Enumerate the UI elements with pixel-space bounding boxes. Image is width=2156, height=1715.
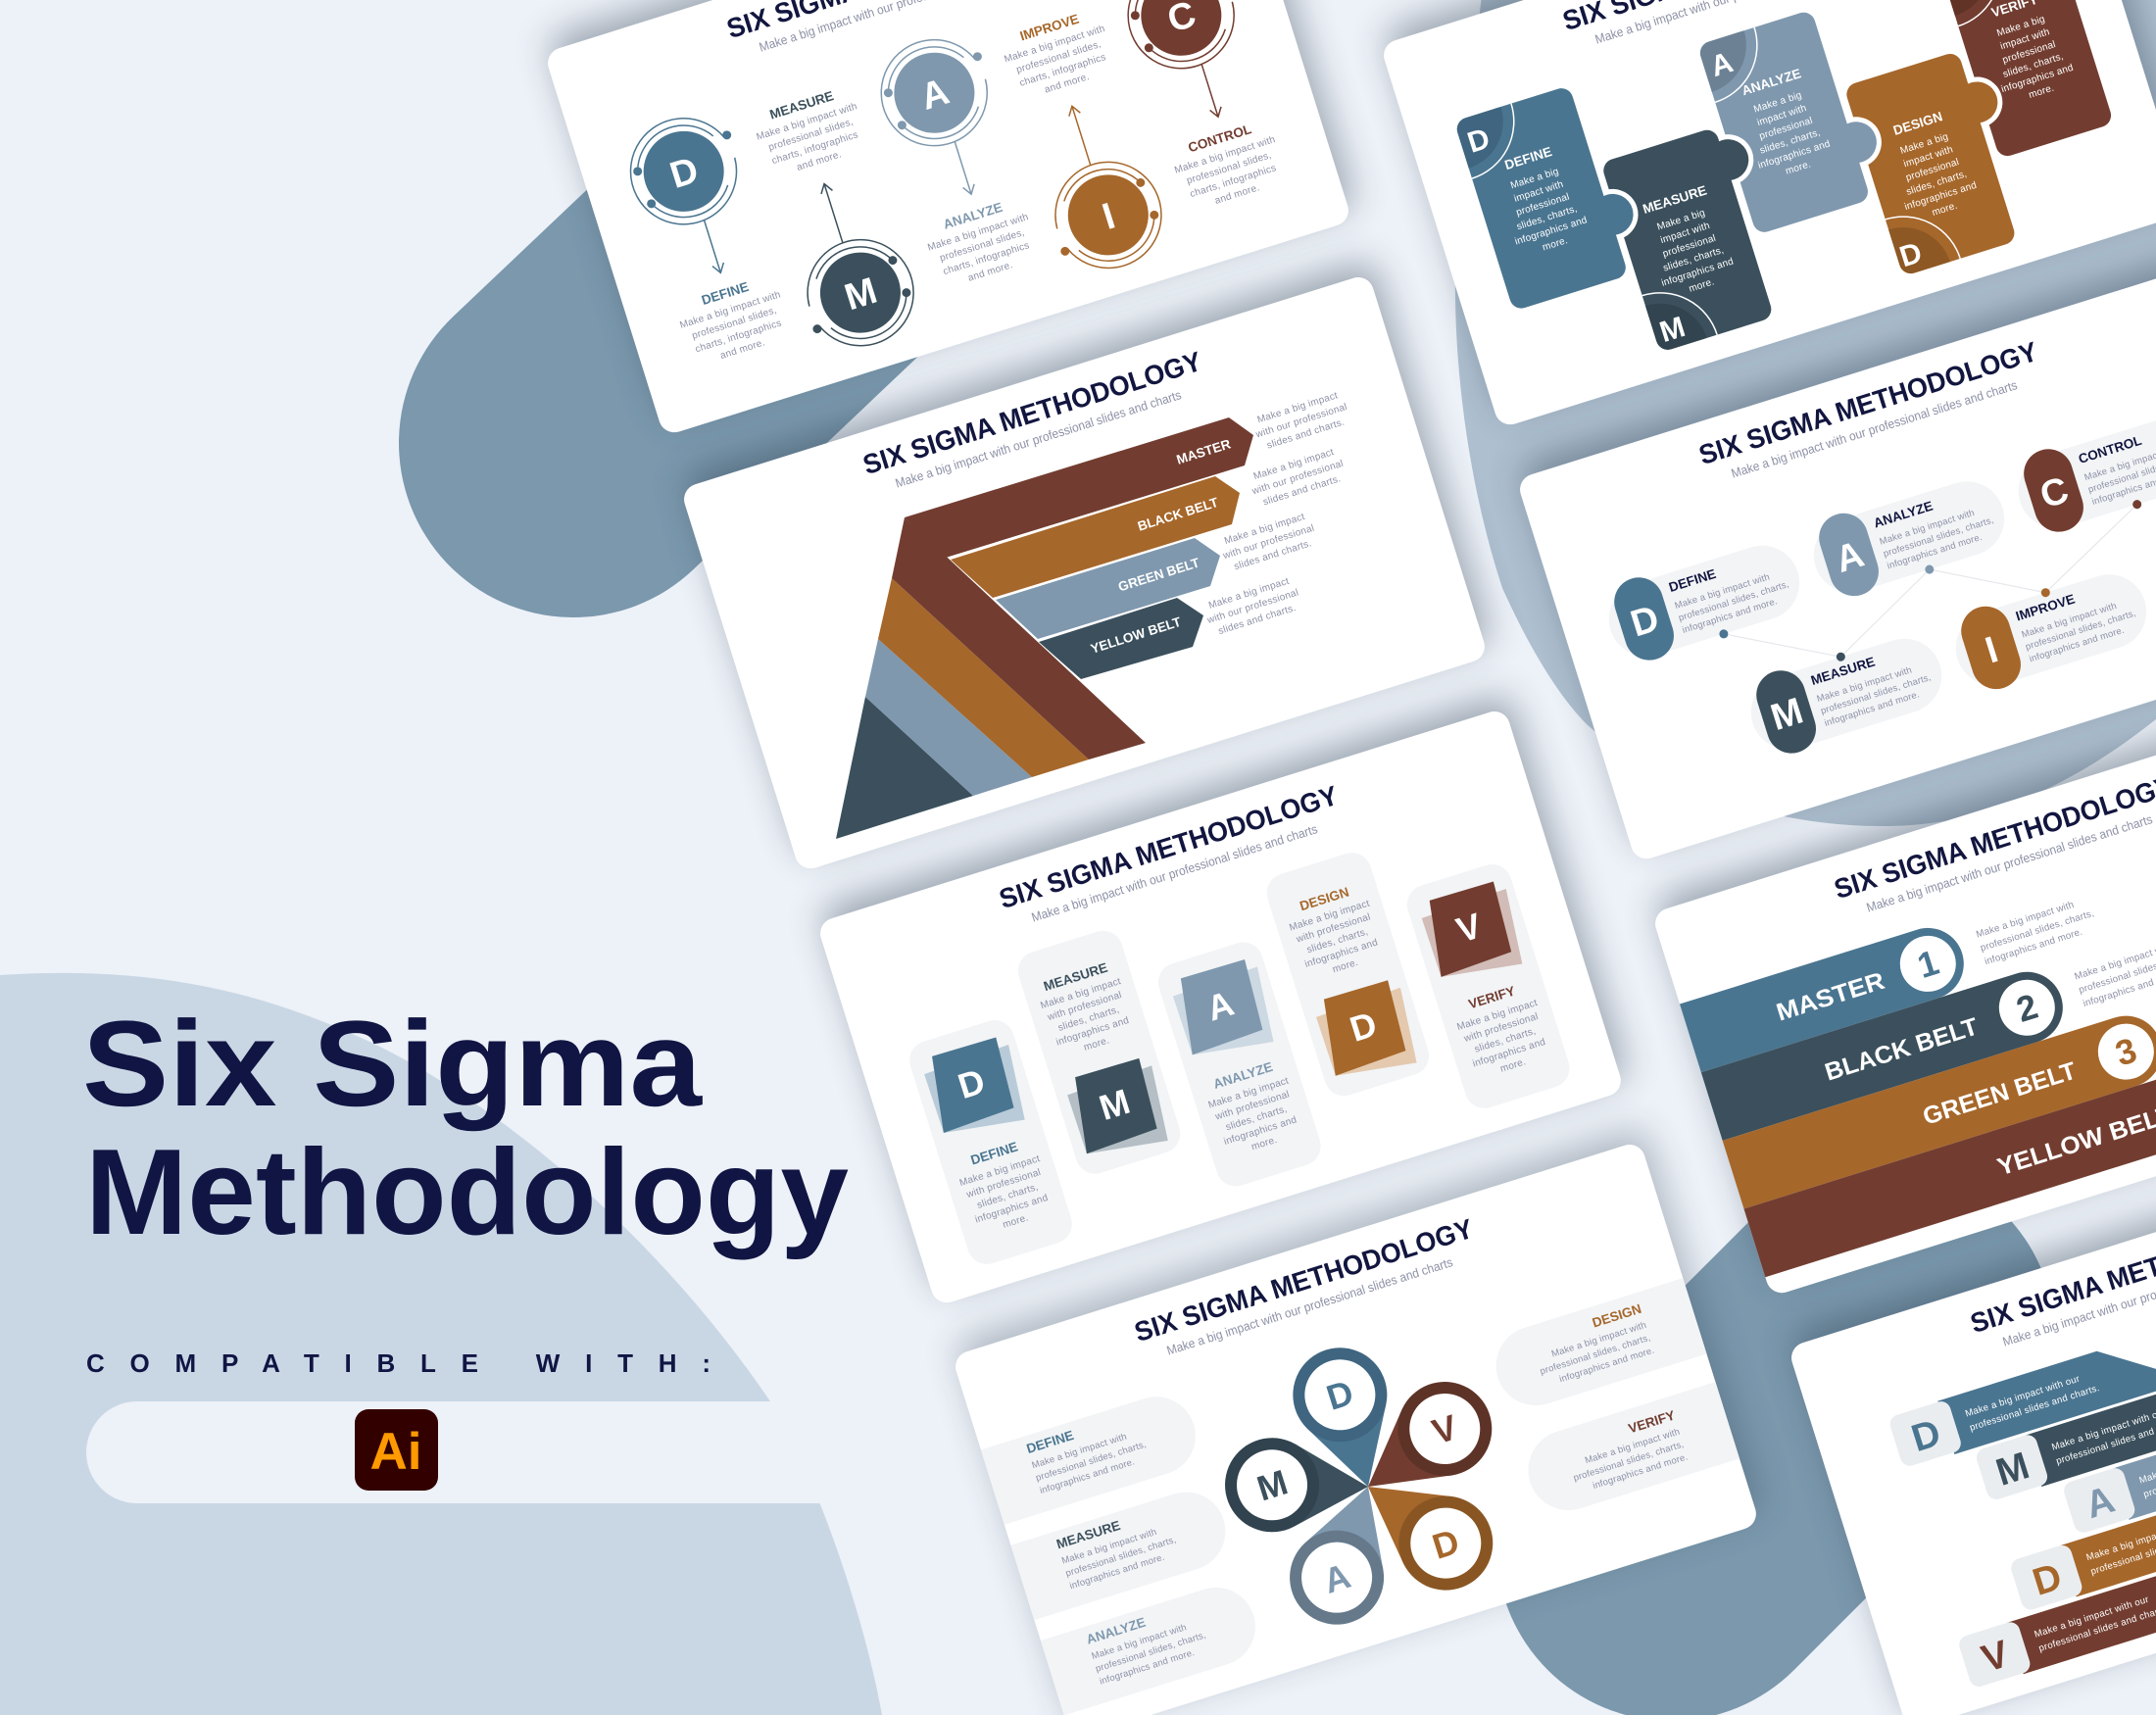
row: define: professional slides and charts. [1969,1383,2101,1434]
main title: Methodology [85,1125,849,1260]
capsule: improve: IMPROVE [2014,592,2077,623]
text: measure body: charts, infographics [770,129,859,167]
slide subtitle: Make a big impact with our professional slides and charts [1165,1254,1455,1358]
text: measure body: Make a big impact with [756,101,858,143]
node: D define: D [665,150,704,197]
piece: analyze: slides, charts, [1758,127,1822,157]
text: measure body: professional slides, [767,117,855,154]
column: define: with professional [964,1167,1042,1200]
capsule: analyze: ANALYZE [1872,498,1935,530]
row: verify: V [1977,1633,2014,1681]
pill: verify: VERIFY [1627,1408,1677,1436]
pill: analyze: infographics and more. [1099,1647,1196,1688]
band: green belt [1723,965,2156,1209]
column: design: more. [1331,957,1359,975]
node: I improve: I [1098,196,1120,238]
piece: analyze: impact with [1756,103,1808,128]
capsule: improve: infographics and more. [2028,625,2126,664]
panel: flower slide [948,1126,1778,1715]
capsule: improve: Make a big impact with [2021,601,2118,641]
band: master: MASTER [1773,967,1887,1027]
panel: stacked rows slide [1784,1117,2156,1715]
band descriptions: with our professional [1250,459,1345,498]
pill: verify: Make a big impact with [1584,1427,1682,1466]
capsule: analyze: infographics and more. [1886,532,1984,571]
slate blob behind left column [573,0,1102,443]
piece: design [1843,42,2044,276]
slide title: SIX SIGMA METHODOLOGY [996,780,1342,914]
band labels: GREEN BELT [1116,555,1201,594]
piece: measure: M [1656,311,1689,349]
piece: design: infographics and [1903,180,1979,213]
pill: measure: Make a big impact with [1060,1527,1158,1567]
flower chart: D [1428,1521,1464,1567]
slide subtitle: Make a big impact with our professional slides and charts [894,387,1184,491]
piece: measure: impact with [1659,220,1711,246]
capsule: measure: Make a big impact with [1816,664,1913,705]
node: M measure: MEASURE [768,88,835,122]
piece: design: impact with [1902,144,1954,170]
capsule: analyze: Make a big impact with [1879,508,1976,548]
capsule: control [2007,402,2156,542]
node: M measure: M [840,270,882,318]
column: analyze [1153,937,1326,1191]
column: measure: Make a big impact [1040,976,1122,1011]
capsule: define: infographics and more. [1681,596,1779,636]
capsule: analyze: A [1831,534,1869,581]
band: green belt: 3 [2111,1030,2141,1074]
node: D define: DEFINE [700,279,751,308]
row: analyze [2062,1363,2156,1536]
band descriptions: Make a big impact [1207,576,1291,612]
pill: define: professional slides, charts, [1035,1440,1148,1484]
panel: puzzle slide [1376,0,2156,428]
panel: columns slide [812,693,1633,1306]
column: verify: V [1451,905,1486,951]
pill: measure: professional slides, charts, [1064,1535,1178,1579]
row: define: Make a big impact with our [1964,1373,2082,1420]
row: verify: Make a big impact with our [2034,1594,2151,1641]
capsule: measure: M [1766,691,1808,739]
piece: verify: infographics and [2000,63,2075,95]
column: define: D [954,1060,990,1106]
band descriptions: slides and charts. [1217,603,1298,637]
column: measure: slides, charts, [1056,1004,1121,1034]
column: define: infographics and [974,1193,1050,1226]
icon: Adobe Illustrator: Ai [370,1423,421,1481]
icon: Adobe Illustrator [355,1409,438,1491]
column: verify: with professional [1462,1011,1540,1045]
row: design [2009,1440,2156,1613]
column: define: slides, charts, [976,1182,1040,1211]
slide subtitle: Make a big impact with our professional slides and charts [1030,821,1320,925]
piece: measure: more. [1688,276,1716,295]
band descriptions: with our professional [1221,523,1316,562]
node: A analyze [851,10,1038,243]
piece: define: slides, charts, [1515,204,1579,232]
text: analyze body: charts, infographics [942,240,1031,277]
piece: measure: slides, charts, [1662,245,1725,274]
piece: analyze: infographics and [1757,138,1832,172]
text: analyze body: professional slides, [939,227,1026,264]
column: measure: M [1095,1081,1135,1128]
node: A analyze: A [916,71,954,119]
band labels: BLACK BELT [1136,495,1221,534]
piece: measure: professional [1661,233,1717,260]
column: measure: more. [1083,1035,1110,1054]
band descriptions: with our professional [1253,402,1348,441]
column: design: DESIGN [1298,884,1350,913]
piece: verify: Make a big [1995,14,2046,39]
band descriptions: Make a big impact [1256,390,1339,425]
piece: analyze: Make a big [1752,90,1803,116]
capsule: analyze: professional slides, charts, [1882,514,1995,560]
capsule: improve: professional slides, charts, [2025,608,2137,653]
pill: define: Make a big impact with [1031,1432,1128,1471]
capsule: measure: infographics and more. [1823,689,1921,729]
column: analyze: ANALYZE [1211,1059,1274,1092]
piece: define: infographics and [1514,215,1589,248]
capsule: define: professional slides, charts, [1678,579,1790,624]
piece: analyze [1697,1,1898,235]
text: improve body: and more. [1044,72,1091,96]
text: define body: charts, infographics [694,318,783,355]
piece: design: more. [1931,201,1959,219]
band labels [1043,436,1279,657]
band: black belt: BLACK BELT [1822,1012,1982,1087]
row: define [1887,1328,2156,1470]
column: measure: infographics and [1054,1015,1131,1049]
column: design: slides, charts, [1305,926,1369,956]
node: C control: CONTROL [1187,122,1253,155]
text: analyze body: Make a big impact with [926,212,1030,254]
flower chart: D [1322,1372,1358,1418]
text: define body: professional slides, [691,305,778,342]
node: C control [1098,0,1285,166]
column: define: Make a big impact [958,1153,1042,1189]
piece: define: more. [1542,235,1569,253]
pill: verify: professional slides, charts, [1572,1439,1686,1484]
column: analyze: slides, charts, [1225,1103,1289,1133]
column: verify: VERIFY [1467,983,1517,1011]
text: control body: charts, infographics [1189,163,1278,200]
piece: measure [1600,119,1801,353]
piece: define: DEFINE [1503,144,1553,172]
row: design: D [2028,1555,2067,1604]
band: black belt: 2 [2012,986,2042,1030]
pill: analyze [1041,1578,1265,1715]
band: master: infographics and more. [1984,927,2083,967]
column: verify: infographics and [1471,1037,1547,1069]
text: improve body: professional slides, [1015,39,1102,75]
pill: define: infographics and more. [1039,1456,1136,1496]
column: design [1262,848,1434,1101]
pale blue dome shape [0,973,882,1715]
column: measure: with professional [1046,990,1123,1023]
column: verify: more. [1499,1056,1527,1075]
piece: verify: professional [2001,39,2057,66]
band: master: Make a big impact with [1975,900,2076,941]
column: design: Make a big impact [1288,899,1371,934]
band descriptions: with our professional [1205,587,1300,626]
band labels: YELLOW BELT [1089,614,1184,657]
slide title: SIX SIGMA METHODOLOGY [1131,1213,1477,1348]
column: analyze: A [1201,983,1239,1029]
piece: analyze: ANALYZE [1740,66,1803,98]
slide subtitle: Make a big impact with our professional slides and charts [1730,377,2020,481]
piece: measure: Make a big [1656,208,1706,233]
light blue blob behind right column [1455,0,2156,826]
piece: analyze: more. [1785,159,1812,177]
row: analyze: A [2081,1479,2120,1527]
flower chart: V [1428,1406,1462,1452]
column: define: more. [1002,1212,1030,1231]
band: master [1680,878,2104,1072]
node: I improve [984,1,1192,298]
piece: analyze: professional [1758,116,1814,142]
column: verify [1402,859,1575,1113]
slide title: SIX SIGMA METHODOLOGY [1695,336,2041,470]
band: master: 1 [1913,942,1943,986]
row: define: D [1907,1412,1945,1460]
capsule: measure: professional slides, charts, [1820,672,1933,717]
capsule: define [1597,530,1810,670]
compatible with label: COMPATIBLE WITH: [86,1348,710,1378]
column: verify: slides, charts, [1473,1026,1538,1055]
panel: belt pyramid slide [673,250,1527,971]
node: D define [601,88,788,321]
band descriptions: slides and charts. [1262,473,1343,508]
piece: verify: slides, charts, [2002,51,2065,80]
text: analyze body: and more. [966,260,1014,284]
row: measure [1974,1330,2156,1502]
column: define [905,1015,1077,1269]
row: verify [1957,1495,2156,1690]
pill: analyze: ANALYZE [1085,1615,1148,1647]
text: improve body: Make a big impact with [1003,24,1106,66]
column: define: DEFINE [969,1139,1019,1168]
capsule: analyze [1802,466,2015,606]
column: design: infographics and [1303,937,1379,970]
main title [82,997,849,1260]
pill: design: infographics and more. [1558,1346,1656,1385]
column: design: D [1346,1004,1382,1050]
capsule: measure [1740,623,1952,762]
band: green belt: GREEN BELT [1920,1057,2080,1131]
band descriptions: Make a big impact [1252,447,1336,482]
band descriptions [1152,389,1401,640]
capsule: improve: I [1981,629,2003,671]
pill: analyze: Make a big impact with [1091,1622,1188,1662]
piece: design: professional [1904,157,1961,183]
piece: measure: MEASURE [1641,182,1708,217]
node: A analyze: ANALYZE [942,200,1004,232]
compatibility pill [86,1401,1017,1503]
capsule: define: Make a big impact with [1674,571,1771,612]
panel: circles slide [540,0,1360,436]
column: analyze: with professional [1213,1089,1291,1123]
capsule: define: D [1626,598,1664,645]
text: improve body: charts, infographics [1018,52,1107,89]
column: measure: MEASURE [1042,960,1109,994]
piece: define: professional [1515,192,1571,219]
band: yellow belt [1743,1051,2156,1277]
band labels: MASTER [1175,436,1233,467]
pill: design: DESIGN [1591,1301,1643,1331]
pill: measure: MEASURE [1054,1518,1122,1551]
piece: design: D [1896,236,1926,273]
band descriptions: slides and charts. [1233,538,1313,572]
text: define body: Make a big impact with [678,289,782,331]
capsule: measure: MEASURE [1809,654,1877,688]
band descriptions: Make a big impact [1223,512,1306,547]
slide title: SIX SIGMA METHODOLOGY [859,346,1205,480]
piece: verify: impact with [1999,26,2051,52]
node: I improve: IMPROVE [1018,12,1081,44]
pill: measure [1010,1482,1235,1620]
flower chart [1224,1336,1511,1638]
piece: define: impact with [1513,179,1565,205]
slate blob bottom right [1671,1337,1881,1546]
piece: define [1454,76,1656,312]
node: M measure [736,78,944,375]
piece: design: slides, charts, [1905,169,1968,198]
piece: design: Make a big [1899,131,1950,157]
capsule: control: C [2035,469,2074,516]
pill: measure: infographics and more. [1068,1552,1166,1592]
column: design: with professional [1295,911,1372,946]
pill: define [981,1387,1205,1525]
flower chart: A [1319,1555,1355,1601]
capsule: improve [1944,560,2156,699]
text: measure body: and more. [796,149,843,173]
text: control body: Make a big impact with [1173,134,1277,176]
piece: design: DESIGN [1891,109,1944,138]
piece: verify: more. [2028,83,2056,101]
band: master: professional slides, charts, [1980,908,2095,954]
pill: design: Make a big impact with [1550,1320,1648,1360]
text: control body: and more. [1213,182,1261,207]
text: control body: professional slides, [1186,150,1273,187]
piece: define: Make a big [1509,167,1560,191]
piece: define: D [1464,122,1494,160]
pyramid chart [836,417,1253,839]
piece: analyze: A [1707,46,1737,83]
pill: verify [1518,1382,1740,1520]
flower chart: M [1252,1461,1293,1509]
column: measure [1013,926,1185,1179]
pill: define: DEFINE [1025,1428,1075,1456]
main title: Six Sigma [82,997,703,1132]
pill: design: professional slides, charts, [1539,1333,1652,1377]
capsule: control: CONTROL [2077,433,2143,466]
band descriptions: slides and charts. [1266,416,1346,452]
pill: verify: infographics and more. [1592,1451,1690,1492]
panel: capsule timeline slide [1512,249,2156,862]
row: measure: M [1991,1445,2034,1494]
column: analyze: infographics and [1223,1114,1298,1148]
capsule: define: DEFINE [1667,566,1718,595]
connector lines [1724,505,2154,688]
column: verify: Make a big impact [1456,998,1539,1033]
text: define body: and more. [719,337,766,362]
pill: analyze: professional slides, charts, [1095,1630,1207,1675]
pill: design [1486,1278,1707,1415]
column: analyze: more. [1250,1135,1279,1152]
column: analyze: Make a big impact [1207,1076,1290,1111]
piece: measure: infographics and [1660,256,1735,289]
piece: verify [1940,0,2114,159]
panel: belts ranking slide [1647,683,2156,1297]
band: black belt [1701,921,2156,1141]
